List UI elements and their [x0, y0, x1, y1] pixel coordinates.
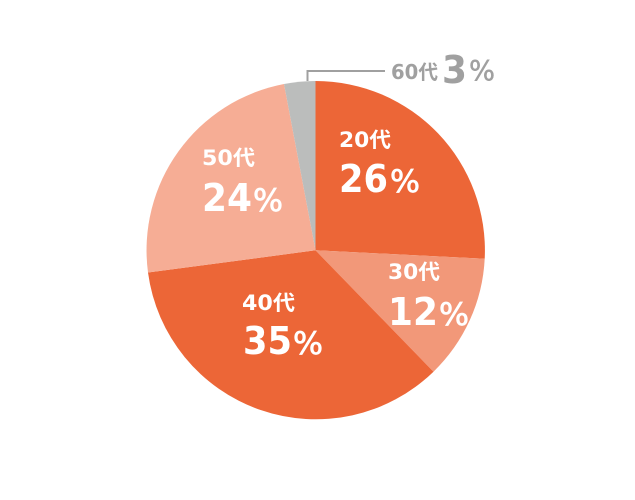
- label: 30s 12%: %: [439, 297, 469, 333]
- pie chart: [147, 81, 485, 419]
- label: 40s 35%: 35: [243, 319, 292, 363]
- label: 50s 24%: 24: [202, 176, 252, 220]
- label: 50s 24%: 50代: [202, 146, 255, 170]
- label: 60s 3%: 3: [442, 48, 467, 92]
- label: 50s 24%: %: [253, 183, 283, 219]
- label: 60s 3%: %: [469, 54, 495, 87]
- label: 60s 3%: [391, 48, 495, 92]
- label: 40s 35%: %: [293, 326, 323, 362]
- slice: 40s 35%: [148, 250, 434, 419]
- label: 40s 35%: 40代: [242, 291, 295, 315]
- slice: 50s 24%: [147, 84, 316, 272]
- label: 20s 26%: 20代: [339, 128, 391, 152]
- leader line: 60s: [308, 71, 385, 81]
- slice: 20s 26%: [316, 81, 485, 259]
- slice: 60s 3%: [284, 81, 316, 250]
- label: 60s 3%: 60代: [391, 60, 438, 84]
- label: 50s 24%: [202, 146, 283, 220]
- label: 40s 35%: [242, 291, 323, 363]
- label: 20s 26%: [339, 128, 420, 201]
- label: 20s 26%: 26: [339, 157, 388, 201]
- label: 30s 12%: [388, 260, 469, 334]
- label: 30s 12%: 12: [388, 290, 438, 334]
- label: 20s 26%: %: [390, 164, 420, 200]
- label: 30s 12%: 30代: [388, 260, 440, 284]
- slice: 30s 12%: [316, 250, 485, 372]
